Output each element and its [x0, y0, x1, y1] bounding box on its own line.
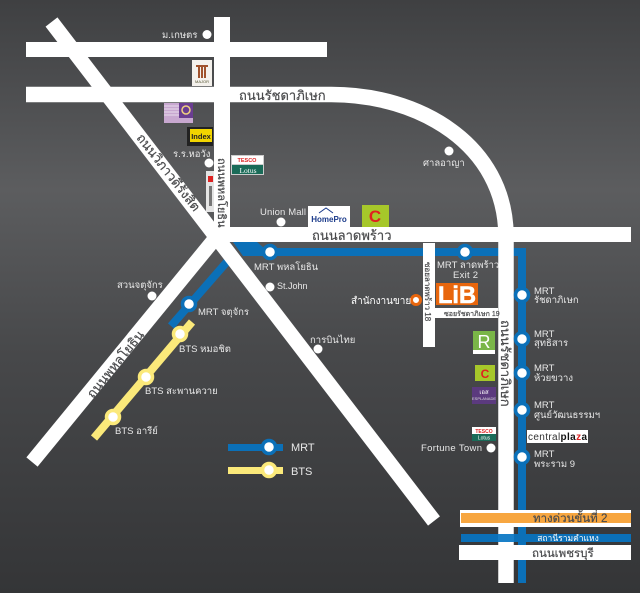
MRT line: horizontal and east branch [171, 242, 526, 583]
logo: Big C small [475, 365, 495, 381]
logo: Big C small: C [481, 367, 490, 381]
road labels: ซอยรัชดาภิเษก 19 [444, 310, 500, 318]
logo: Major [192, 60, 212, 86]
logo: Big C: C [369, 207, 381, 226]
logo: Esplanade: เอส [479, 389, 489, 396]
station labels: MRT [534, 329, 555, 340]
legend [228, 440, 315, 478]
logo: Central Plaza: centralplaza [528, 432, 587, 443]
MRT stations [182, 246, 528, 464]
station labels: ห้วยขวาง [534, 373, 573, 384]
station labels: MRT [534, 400, 555, 411]
highway bands: ทางด่วนขั้นที่ 2 [533, 510, 607, 525]
highway bands: สถานีรามคำแหง [537, 533, 599, 543]
landmarks: St.John [277, 281, 308, 291]
BTS line [94, 322, 192, 438]
station labels: MRT [534, 286, 555, 297]
logo: HomePro: HomePro [311, 215, 347, 224]
station labels: ศูนย์วัฒนธรรมฯ [534, 409, 600, 421]
road labels: ถนนรัชดาภิเษก [498, 320, 513, 407]
station labels: MRT ลาดพร้าว [437, 260, 499, 271]
logo: Esplanade [472, 387, 496, 404]
logo: Tesco Lotus small: Lotus [478, 436, 491, 442]
station labels: MRT พหลโยธิน [254, 261, 319, 273]
sales office marker: สำนักงานขาย [351, 296, 411, 307]
station labels: รัชดาภิเษก [534, 295, 579, 306]
landmarks [117, 30, 496, 454]
landmarks: ร.ร.หอวัง [173, 149, 210, 160]
logo: Index: Index [191, 132, 212, 141]
landmarks: สวนจตุจักร [117, 280, 163, 291]
landmarks: การบินไทย [310, 334, 355, 346]
station labels: BTS อารีย์ [115, 425, 158, 437]
road labels [84, 88, 513, 407]
logo: Index [187, 127, 213, 146]
station labels: BTS สะพานควาย [145, 386, 218, 397]
road labels: ถนนพหลโยธิน [215, 158, 229, 228]
landmarks: ศาลอาญา [423, 158, 465, 169]
logo: HomePro [308, 206, 350, 227]
road labels: ถนนลาดพร้าว [312, 228, 392, 243]
station labels: MRT จตุจักร [198, 307, 249, 318]
logo: Tesco Lotus small [472, 427, 496, 442]
logo: Tesco Lotus [231, 155, 264, 175]
station labels: MRT [534, 449, 555, 460]
logo: Tesco Lotus: TESCO [238, 158, 257, 164]
landmarks: Fortune Town [421, 443, 482, 454]
logo: Big C [362, 205, 389, 227]
logo: Robinson [473, 331, 495, 354]
road labels: ถนนพหลโยธิน [84, 328, 147, 401]
road labels: ถนนวิภาวดีรังสิต [134, 131, 203, 214]
logo: Tesco Lotus small: TESCO [475, 429, 493, 435]
highway bands [459, 510, 631, 560]
station labels: พระราม 9 [534, 459, 575, 470]
station labels: Exit 2 [453, 270, 478, 281]
road labels: ถนนรัชดาภิเษก [239, 88, 326, 103]
legend: BTS [291, 466, 312, 478]
station labels: สุทธิสาร [534, 338, 568, 349]
station labels: MRT [534, 363, 555, 374]
logo: Robinson: R [478, 332, 490, 352]
highway bands: ถนนเพชรบุรี [532, 547, 594, 560]
landmarks: Union Mall [260, 207, 306, 218]
road labels: ซอยลาดพร้าว 18 [423, 262, 432, 322]
station labels [115, 260, 600, 470]
BTS stations [106, 328, 186, 424]
logo: Central vertical sign [206, 171, 214, 212]
logo: Tesco Lotus: Lotus [239, 166, 257, 175]
station labels: BTS หมอชิต [179, 344, 231, 355]
landmarks: ม.เกษตร [162, 30, 197, 41]
logo: Major: MAJOR [195, 79, 209, 84]
legend: MRT [291, 442, 315, 454]
logo: SCB [164, 103, 193, 123]
logo: LIB: LiB [438, 282, 476, 309]
logo: Esplanade: ESPLANADE [472, 396, 496, 401]
